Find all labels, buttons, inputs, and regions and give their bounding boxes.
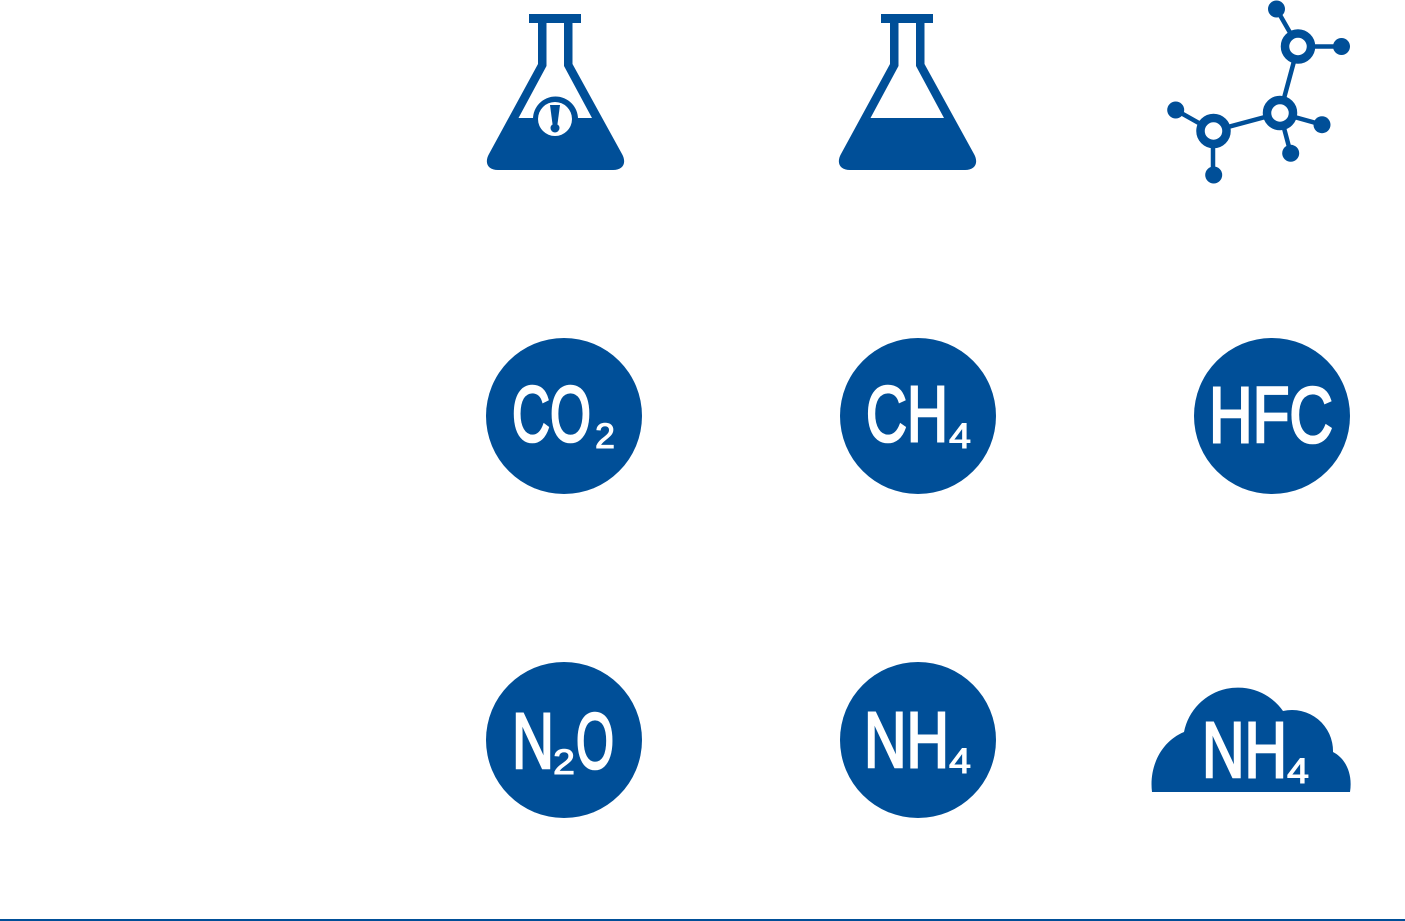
icon: CH4 badge: 4 [949,417,971,456]
icon: NH4 cloud: 4 [1287,752,1309,791]
icon: HFC badge: HFC [1209,370,1333,459]
icon: CH4 badge [840,338,996,494]
icon: NH4 badge: 4 [949,742,971,781]
icon: molecule [1167,0,1350,184]
icon: NH4 badge [840,662,996,818]
icon: CO2 badge: 2 [595,417,615,456]
icon: NH4 badge: NH [864,695,949,784]
icon: NH4 cloud [1152,688,1351,794]
icon: N2O badge [486,662,642,818]
icon: N2O badge: N [512,696,554,785]
icon: CH4 badge: CH [866,369,948,458]
icon: flask [839,14,976,170]
bottom rule [0,919,1405,921]
icon: N2O badge: 2 [553,743,575,782]
icon: HFC badge [1194,338,1350,494]
icon: CO2 badge: CO [512,369,591,458]
icon: N2O badge: O [576,696,614,785]
icon: NH4 cloud: NH [1202,705,1287,794]
icon: CO2 badge [486,338,642,494]
icon: flask with warning [487,14,624,170]
